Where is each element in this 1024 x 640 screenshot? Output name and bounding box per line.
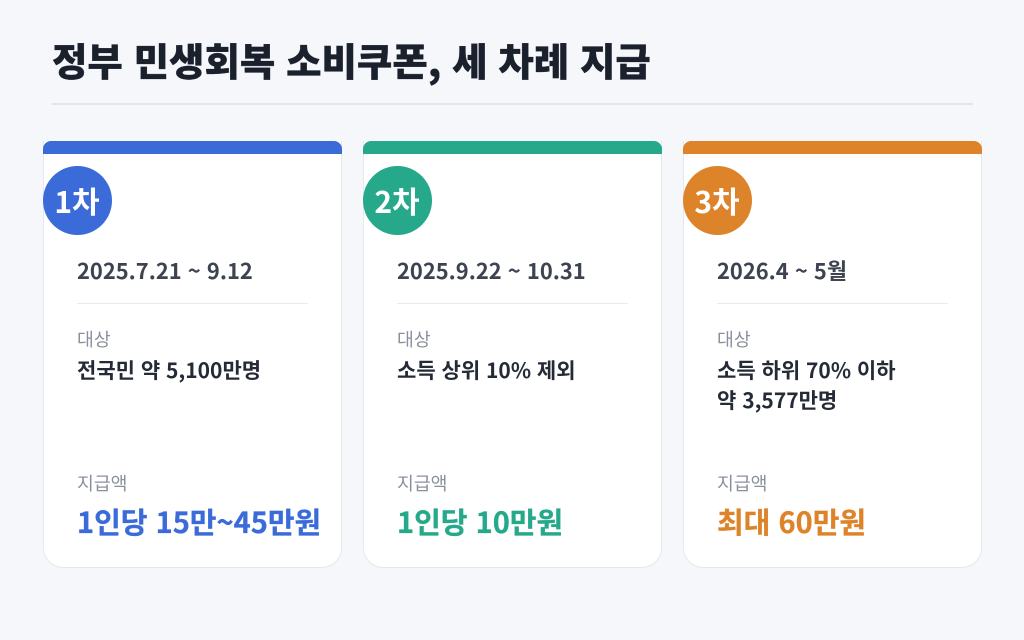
top bar: round 2 xyxy=(363,141,662,154)
label: amount round 3: 지급액 xyxy=(717,470,767,496)
panel: round 1 xyxy=(43,141,342,568)
target text: round 2: 소득 상위 10% 제외 xyxy=(397,355,576,385)
label: amount round 1: 지급액 xyxy=(77,470,127,496)
date: round 3: 2026.4 ~ 5월 xyxy=(717,255,847,286)
amount: round 1: 1인당 15만~45만원 xyxy=(77,500,321,542)
badge: round 3 xyxy=(683,166,752,235)
date: round 2: 2025.9.22 ~ 10.31 xyxy=(397,255,586,286)
title: 정부 민생회복 소비쿠폰, 세 차례 지급 xyxy=(52,32,651,88)
badge: round 2: 2차 xyxy=(374,178,420,222)
badge: round 1 xyxy=(43,166,112,235)
target text: round 1: 전국민 약 5,100만명 xyxy=(77,355,261,385)
badge: round 1: 1차 xyxy=(54,178,100,222)
badge: round 3: 3차 xyxy=(694,178,740,222)
label: target round 2: 대상 xyxy=(397,326,431,352)
panel: round 3 xyxy=(683,141,982,568)
badge: round 2 xyxy=(363,166,432,235)
label: target round 1: 대상 xyxy=(77,326,111,352)
label: target round 3: 대상 xyxy=(717,326,751,352)
top bar: round 1 xyxy=(43,141,342,154)
label: amount round 2: 지급액 xyxy=(397,470,447,496)
amount: round 3: 최대 60만원 xyxy=(717,500,866,542)
panel: round 2 xyxy=(363,141,662,568)
target text: round 3: 약 3,577만명 xyxy=(717,385,837,415)
date: round 1: 2025.7.21 ~ 9.12 xyxy=(77,255,253,286)
target text: round 3: 소득 하위 70% 이하 xyxy=(717,355,896,385)
target text: round 3 xyxy=(717,355,896,415)
amount: round 2: 1인당 10만원 xyxy=(397,500,563,542)
top bar: round 3 xyxy=(683,141,982,154)
